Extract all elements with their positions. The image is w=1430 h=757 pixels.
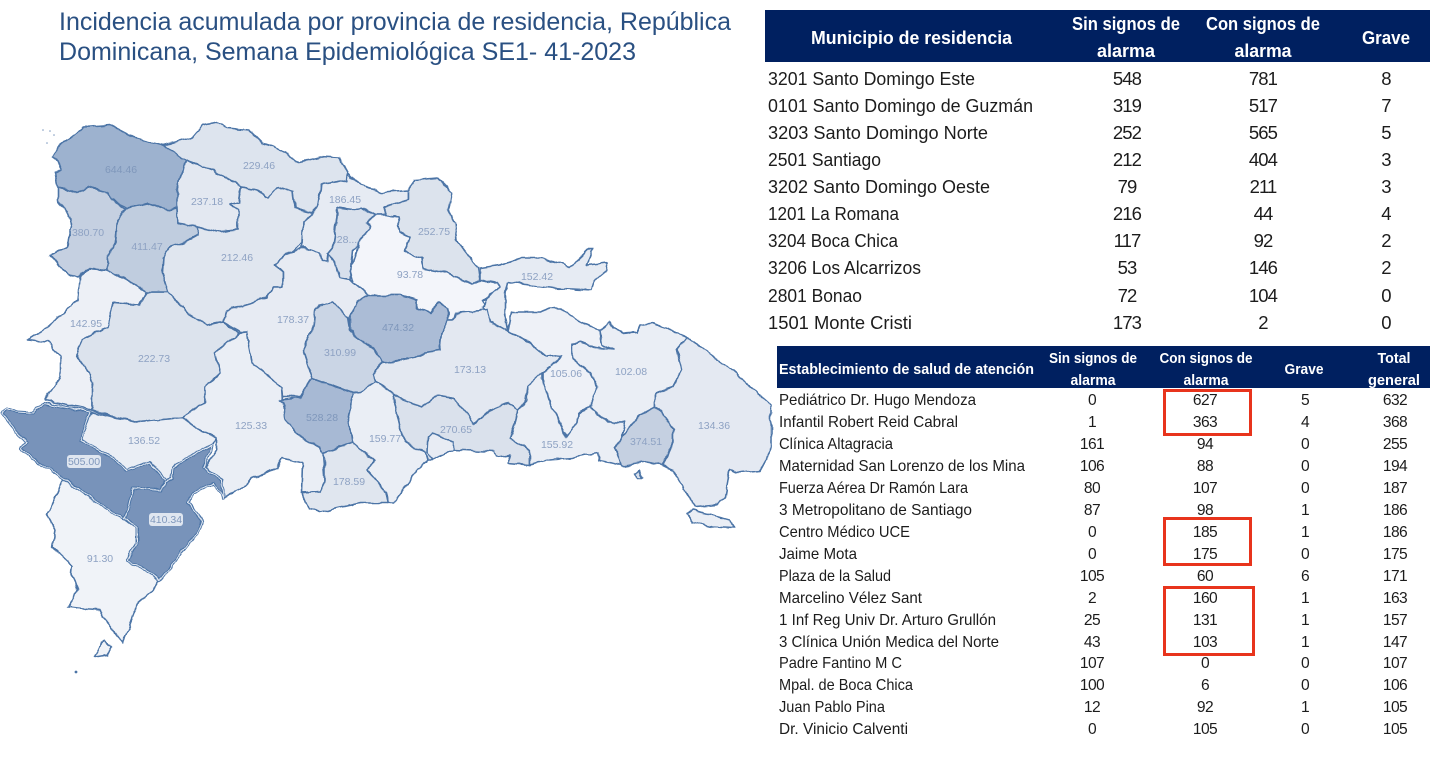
row: Clínica Altagracia	[779, 436, 893, 453]
row: 171	[1383, 568, 1407, 585]
province 212.46	[162, 187, 312, 325]
row: Juan Pablo Pina	[779, 699, 885, 716]
province 105.06: 105.06	[550, 368, 582, 380]
row: 3 Metropolitano de Santiago	[779, 502, 972, 519]
row: 3	[1381, 176, 1391, 197]
province 178.59: 178.59	[333, 476, 365, 488]
row: 1 Inf Reg Univ Dr. Arturo Grullón	[779, 612, 996, 629]
province 410.34	[123, 445, 223, 580]
province 505.00: 505.00	[68, 456, 100, 468]
row: 6	[1301, 568, 1309, 585]
row: 92	[1197, 699, 1213, 716]
row: 0	[1301, 436, 1310, 453]
row: 6	[1201, 677, 1209, 694]
province 229.46: 229.46	[243, 160, 275, 172]
row	[779, 392, 1407, 409]
row: 4	[1381, 203, 1391, 224]
table header: Municipio de residencia	[811, 27, 1013, 48]
row: 5	[1301, 392, 1310, 409]
row: 3204 Boca Chica	[768, 230, 899, 251]
row: 627	[1193, 392, 1217, 409]
province 159.77	[348, 382, 427, 503]
table header	[777, 346, 1430, 389]
row: 157	[1383, 612, 1407, 629]
row: Mpal. de Boca Chica	[779, 677, 913, 694]
row: 117	[1114, 230, 1141, 251]
province 505.00	[2, 403, 165, 518]
province 28...	[328, 207, 375, 280]
row: 319	[1113, 95, 1142, 116]
row: Plaza de la Salud	[779, 568, 891, 585]
province 270.65: 270.65	[440, 424, 472, 436]
row: 79	[1118, 176, 1137, 197]
row: 107	[1193, 480, 1217, 497]
province 159.77: 159.77	[369, 433, 401, 445]
row	[779, 568, 1407, 585]
row: 216	[1113, 203, 1142, 224]
row: 88	[1197, 458, 1213, 475]
row: 2	[1381, 257, 1391, 278]
row	[768, 257, 1391, 278]
row: 100	[1080, 677, 1105, 694]
province 93.78	[350, 215, 500, 320]
row: 0	[1088, 524, 1097, 541]
row: Maternidad San Lorenzo de los Mina	[779, 458, 1025, 475]
province 222.73	[77, 292, 238, 422]
row: 0	[1088, 546, 1097, 563]
province 91.30: 91.30	[87, 553, 113, 565]
row: 43	[1084, 634, 1100, 651]
province 528.28	[280, 378, 353, 453]
table header: general	[1368, 372, 1420, 389]
row: 0	[1088, 392, 1097, 409]
island: Catalinita	[635, 470, 643, 478]
row: 175	[1193, 546, 1218, 563]
row: 107	[1080, 655, 1104, 672]
row: 107	[1383, 655, 1407, 672]
row: 8	[1381, 68, 1391, 89]
province 410.34: 410.34	[150, 514, 182, 526]
row: 0	[1301, 721, 1310, 738]
row: 92	[1254, 230, 1273, 251]
row: Padre Fantino M C	[779, 655, 902, 672]
province 173.13	[373, 310, 562, 425]
row: 105	[1080, 568, 1105, 585]
province 93.78: 93.78	[397, 269, 423, 281]
row: 0	[1381, 312, 1391, 333]
row: 781	[1249, 68, 1278, 89]
row: 0	[1301, 677, 1310, 694]
row: 3206 Los Alcarrizos	[768, 257, 921, 278]
row: 147	[1383, 634, 1407, 651]
table header: Grave	[1362, 27, 1410, 48]
row	[779, 502, 1407, 519]
province 142.95: 142.95	[70, 318, 102, 330]
row: 146	[1249, 257, 1278, 278]
province 125.33: 125.33	[235, 420, 267, 432]
province 178.37: 178.37	[277, 314, 309, 326]
row	[779, 458, 1408, 475]
row: 7	[1381, 95, 1391, 116]
row: Dr. Vinicio Calventi	[779, 721, 908, 738]
row: Pediátrico Dr. Hugo Mendoza	[779, 392, 976, 409]
row: 0	[1301, 546, 1310, 563]
row: 25	[1084, 612, 1101, 629]
province 134.36: 134.36	[698, 420, 730, 432]
row	[779, 590, 1407, 607]
title: Dominicana, Semana Epidemiológica SE1- 41-2023	[59, 38, 636, 66]
row: 0	[1088, 721, 1097, 738]
title	[59, 8, 732, 66]
row: 1	[1301, 590, 1309, 607]
island: Saona	[687, 510, 733, 528]
row: 105	[1193, 721, 1218, 738]
table header: alarma	[1234, 40, 1292, 61]
row: 0	[1301, 480, 1310, 497]
row	[768, 203, 1391, 224]
province 380.70: 380.70	[72, 227, 104, 239]
row	[779, 699, 1408, 716]
province 252.75: 252.75	[418, 226, 450, 238]
row: 4	[1301, 414, 1310, 431]
row	[779, 721, 1408, 738]
row: 163	[1383, 590, 1407, 607]
province 102.08	[572, 322, 687, 437]
province 474.32: 474.32	[382, 322, 414, 334]
row	[768, 122, 1391, 143]
row	[779, 436, 1408, 453]
row: 363	[1193, 414, 1217, 431]
row: 87	[1084, 502, 1100, 519]
row: 1201 La Romana	[768, 203, 900, 224]
row: 1	[1301, 524, 1309, 541]
row: 517	[1249, 95, 1278, 116]
table header: Sin signos de	[1049, 350, 1137, 367]
province 237.18	[177, 160, 242, 232]
row: 94	[1197, 436, 1214, 453]
row: 173	[1113, 312, 1142, 333]
row: 1	[1301, 502, 1309, 519]
red highlight box 2	[1164, 518, 1250, 564]
row: 404	[1249, 149, 1278, 170]
island: Beata	[95, 640, 112, 657]
row	[768, 285, 1391, 306]
province 136.52: 136.52	[128, 435, 160, 447]
province 105.06	[508, 308, 613, 437]
province 178.59	[302, 442, 388, 512]
row	[779, 677, 1407, 694]
row: 44	[1254, 203, 1273, 224]
row	[779, 480, 1407, 497]
row: 0	[1301, 458, 1310, 475]
row: 104	[1249, 285, 1278, 306]
table header: Total	[1378, 350, 1410, 367]
province 155.92	[510, 372, 625, 465]
row: 98	[1197, 502, 1213, 519]
table header: Establecimiento de salud de atención	[779, 361, 1034, 378]
table header: Con signos de	[1160, 350, 1252, 367]
province 644.46	[52, 125, 185, 210]
row: Jaime Mota	[779, 546, 857, 563]
province 136.52	[80, 412, 217, 480]
row: 103	[1193, 634, 1217, 651]
row	[779, 546, 1408, 563]
table header: Con signos de	[1206, 13, 1320, 34]
row: Centro Médico UCE	[779, 524, 910, 541]
row: 106	[1080, 458, 1104, 475]
row	[768, 230, 1391, 251]
row: 2	[1088, 590, 1096, 607]
row: 1	[1301, 612, 1309, 629]
row: 0	[1301, 655, 1310, 672]
row: 5	[1381, 122, 1391, 143]
province 186.45: 186.45	[329, 194, 361, 206]
row	[779, 414, 1407, 431]
province 237.18: 237.18	[191, 196, 223, 208]
row: 548	[1113, 68, 1142, 89]
province 374.51	[615, 407, 673, 466]
province 102.08: 102.08	[615, 366, 647, 378]
row: 186	[1383, 524, 1407, 541]
row	[779, 524, 1407, 541]
row: 1	[1088, 414, 1096, 431]
province 528.28: 528.28	[306, 412, 338, 424]
province 310.99	[303, 302, 382, 393]
row: 186	[1383, 502, 1407, 519]
province 222.73: 222.73	[138, 353, 170, 365]
table: municipio de residencia	[765, 10, 1430, 333]
row: 161	[1080, 436, 1104, 453]
row	[768, 149, 1391, 170]
row: 632	[1383, 392, 1407, 409]
row: 3201 Santo Domingo Este	[768, 68, 975, 89]
row: 565	[1249, 122, 1278, 143]
province 380.70	[50, 187, 125, 277]
row: 2	[1258, 312, 1268, 333]
province 91.30	[47, 478, 160, 643]
province 229.46	[163, 122, 348, 213]
choropleth map of the Dominican Republic	[2, 122, 771, 673]
province 644.46: 644.46	[105, 164, 137, 176]
row: 131	[1193, 612, 1217, 629]
province 212.46: 212.46	[221, 252, 253, 264]
table header: alarma	[1184, 372, 1229, 389]
row: 53	[1118, 257, 1137, 278]
row: 1	[1301, 699, 1309, 716]
province 252.75	[385, 178, 480, 285]
province 152.42: 152.42	[521, 271, 553, 283]
province 142.95	[27, 268, 147, 410]
row: 2801 Bonao	[768, 285, 862, 306]
row: 3	[1381, 149, 1391, 170]
row: 194	[1383, 458, 1408, 475]
row	[779, 634, 1407, 651]
row	[779, 655, 1407, 672]
row	[779, 612, 1407, 629]
province 186.45	[302, 173, 408, 262]
row	[768, 68, 1391, 89]
province 152.42	[480, 250, 607, 332]
row: 1501 Monte Cristi	[768, 312, 912, 333]
province 310.99: 310.99	[324, 347, 356, 359]
row: 2501 Santiago	[768, 149, 881, 170]
row	[768, 312, 1391, 333]
islet dot south of Beata	[75, 671, 77, 673]
province 125.33	[182, 332, 325, 498]
row: 0	[1201, 655, 1210, 672]
province 155.92: 155.92	[541, 439, 573, 451]
row: Fuerza Aérea Dr Ramón Lara	[779, 480, 968, 497]
row: 1	[1301, 634, 1309, 651]
row: 160	[1193, 590, 1218, 607]
province 28...: 28...	[337, 234, 357, 246]
row: 60	[1197, 568, 1214, 585]
province 270.65	[393, 393, 530, 465]
row: 12	[1084, 699, 1100, 716]
row: 212	[1113, 149, 1142, 170]
table header: Grave	[1284, 361, 1324, 378]
row: 187	[1383, 480, 1407, 497]
province 411.47: 411.47	[131, 241, 163, 253]
province 374.51: 374.51	[630, 436, 662, 448]
red highlight box 3	[1164, 588, 1254, 654]
row: 0101 Santo Domingo de Guzmán	[768, 95, 1033, 116]
row: 105	[1383, 721, 1408, 738]
row: 3202 Santo Domingo Oeste	[768, 176, 990, 197]
red highlight box 1	[1164, 390, 1250, 434]
province 134.36	[655, 337, 771, 507]
row: 175	[1383, 546, 1408, 563]
row: 106	[1383, 677, 1407, 694]
row: 211	[1250, 176, 1277, 197]
table header: alarma	[1070, 372, 1116, 389]
row: 3 Clínica Unión Medica del Norte	[779, 634, 999, 651]
row: Infantil Robert Reid Cabral	[779, 414, 958, 431]
row: 80	[1084, 480, 1101, 497]
table: establecimiento de salud	[777, 346, 1430, 738]
row: 368	[1383, 414, 1407, 431]
row: 185	[1193, 524, 1218, 541]
province 173.13: 173.13	[454, 364, 486, 376]
title: Incidencia acumulada por provincia de residencia, República	[59, 8, 732, 36]
province 474.32	[350, 295, 448, 362]
province 411.47	[107, 203, 198, 292]
row	[768, 95, 1391, 116]
table header: alarma	[1097, 40, 1156, 61]
Cayos Siete Hermanos dots	[42, 129, 55, 144]
province 178.37	[223, 247, 368, 397]
row: Marcelino Vélez Sant	[779, 590, 923, 607]
row: 2	[1381, 230, 1391, 251]
row: 105	[1383, 699, 1408, 716]
table header: Sin signos de	[1072, 13, 1180, 34]
row: 72	[1118, 285, 1137, 306]
row: 3203 Santo Domingo Norte	[768, 122, 988, 143]
row: 252	[1113, 122, 1142, 143]
table header	[765, 10, 1430, 62]
row: 255	[1383, 436, 1408, 453]
row: 0	[1381, 285, 1391, 306]
row	[768, 176, 1391, 197]
